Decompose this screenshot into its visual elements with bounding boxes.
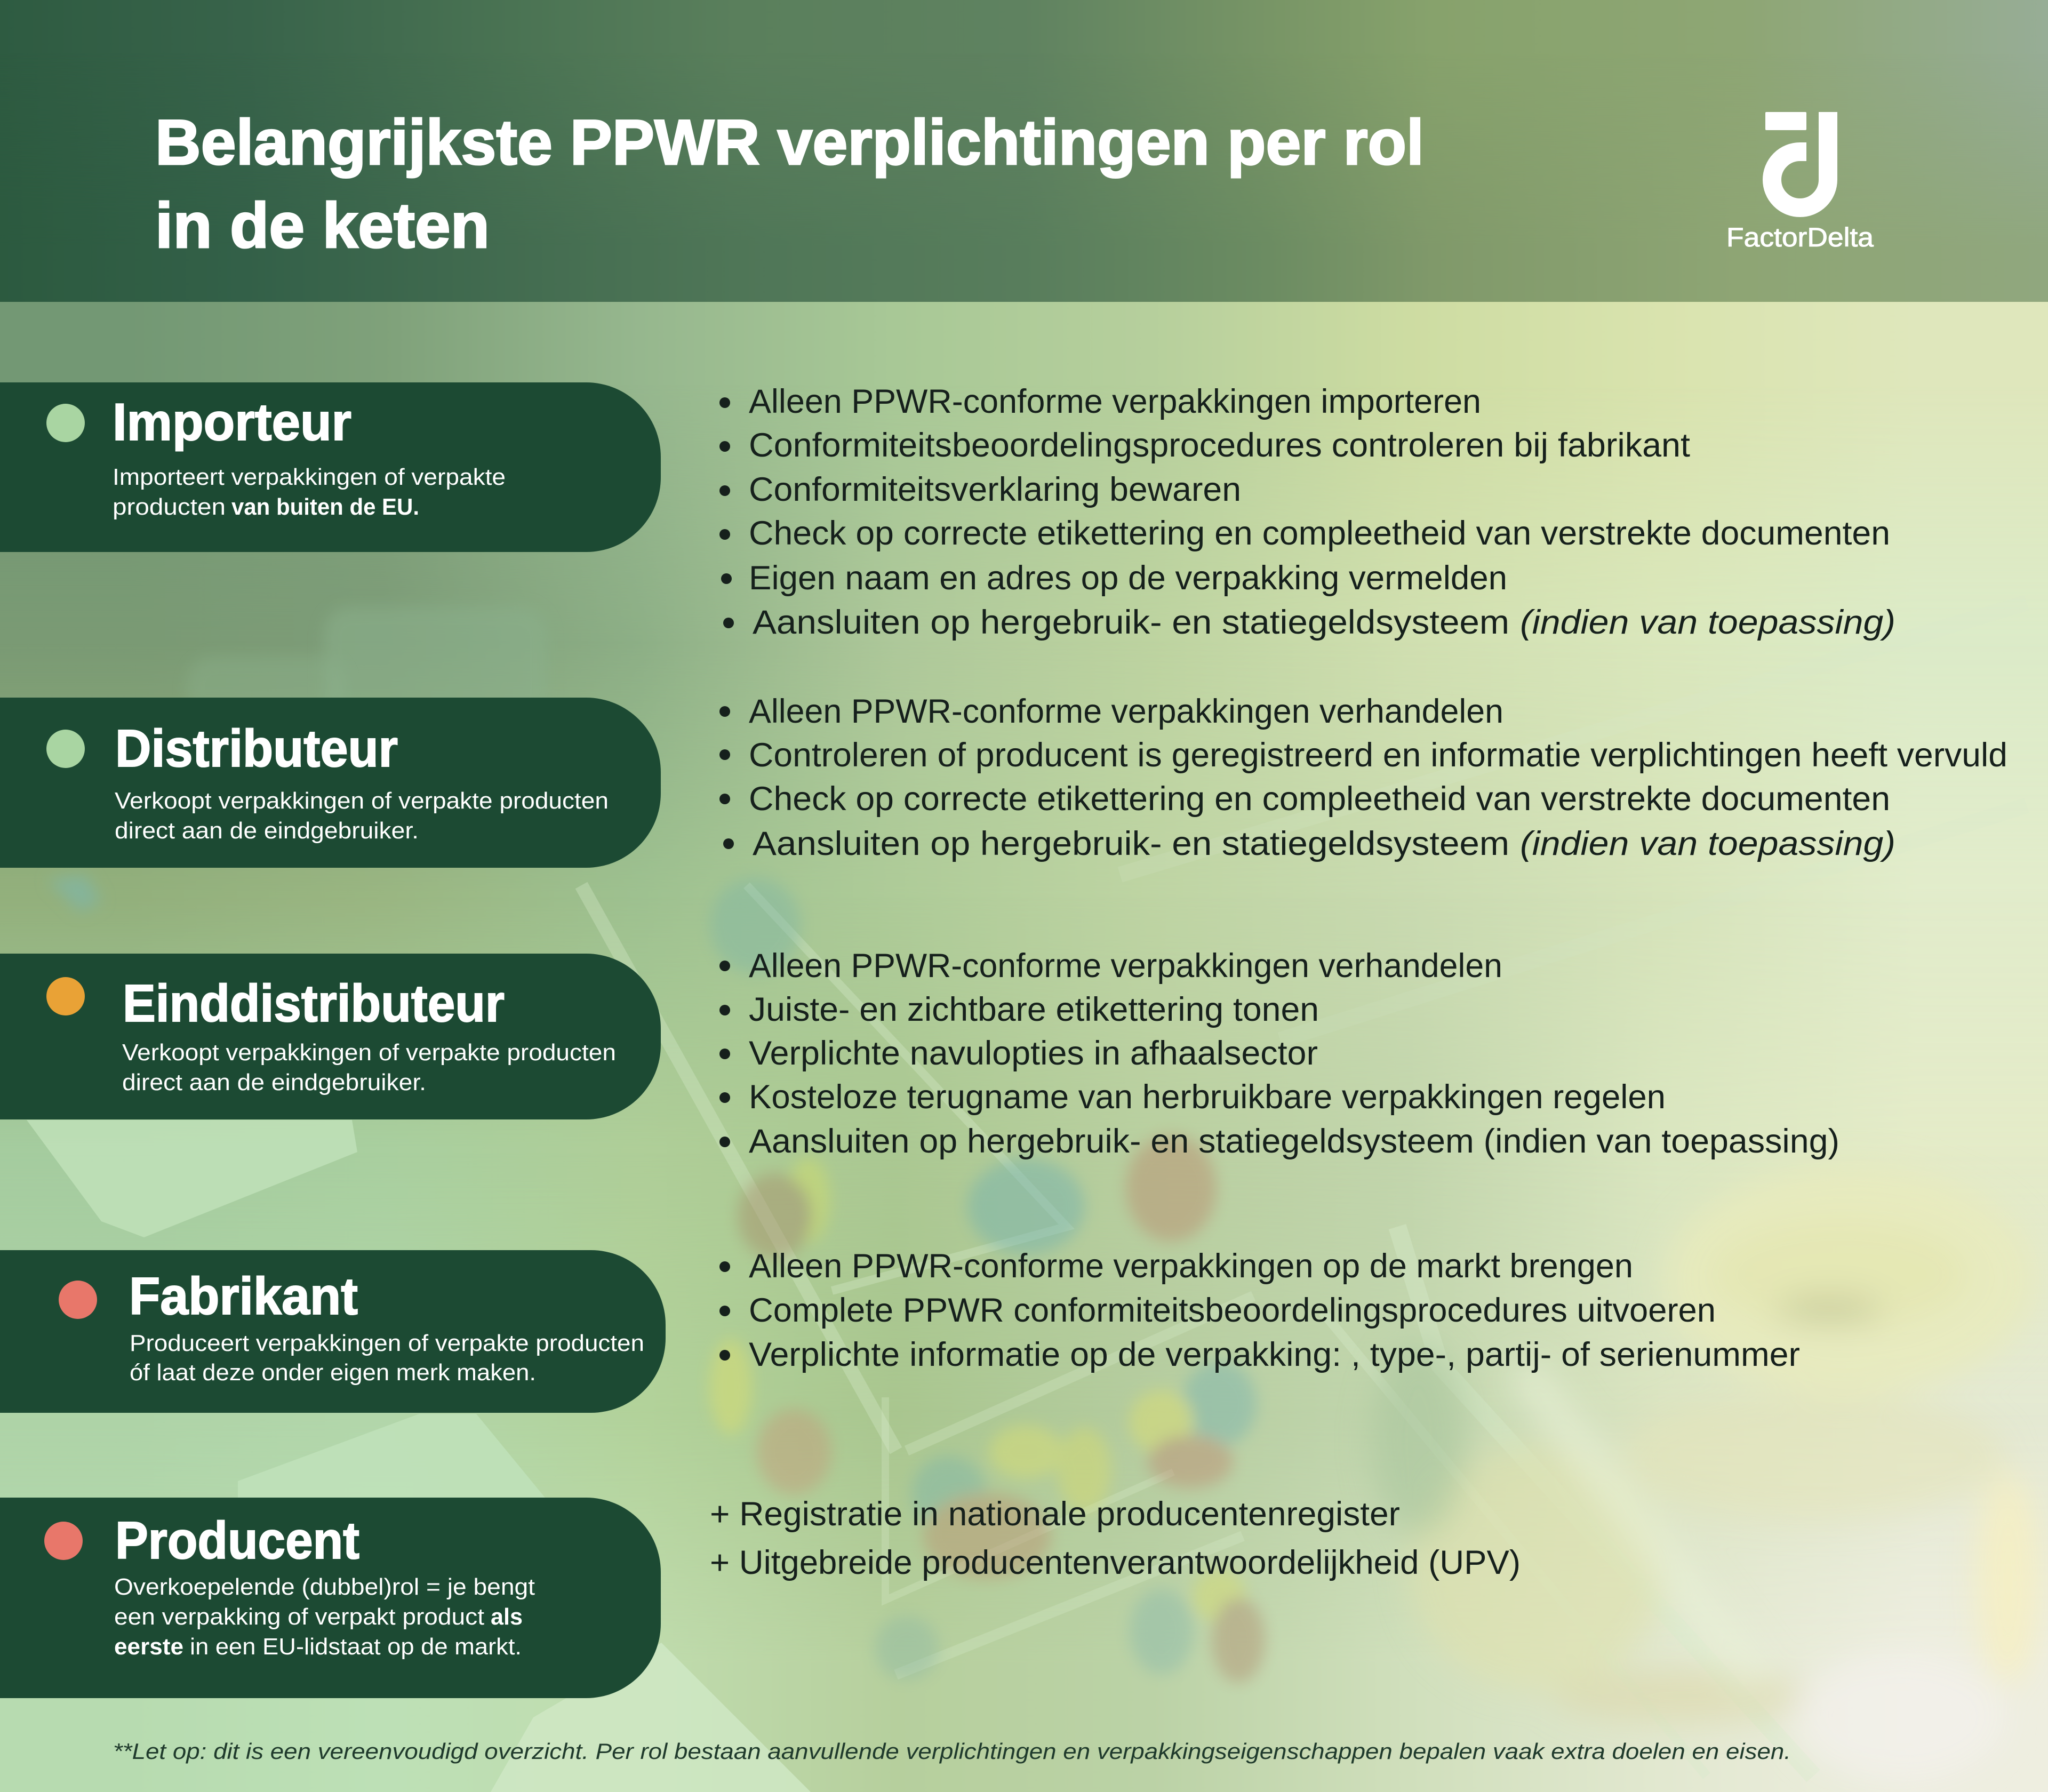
description: Verkoopt verpakkingen of verpakte producten bbox=[115, 788, 609, 814]
cookies bbox=[1371, 1165, 2040, 1781]
panel: Fabrikant bbox=[0, 1250, 666, 1413]
heading: Distributeur bbox=[115, 719, 398, 778]
logo: FactorDelta bbox=[1726, 112, 1874, 252]
description: van buiten de EU. bbox=[231, 494, 419, 520]
header band bbox=[0, 0, 2048, 302]
list: Importeur obligations bbox=[719, 383, 1895, 641]
panel: Einddistributeur bbox=[0, 954, 661, 1119]
status dot bbox=[46, 404, 85, 442]
heading: Einddistributeur bbox=[123, 974, 505, 1033]
description: eerste bbox=[114, 1634, 183, 1660]
logo: FactorDelta: FactorDelta bbox=[1726, 222, 1874, 252]
heading: Importeur bbox=[113, 393, 351, 451]
title: Belangrijkste PPWR verplichtingen per rol bbox=[155, 107, 1424, 178]
description: in een EU-lidstaat op de markt. bbox=[190, 1634, 522, 1660]
packaging cards bbox=[27, 607, 811, 1792]
description: Produceert verpakkingen of verpakte producten bbox=[130, 1330, 644, 1356]
status dot bbox=[46, 977, 85, 1015]
description bbox=[115, 788, 609, 844]
jar outlines bbox=[581, 603, 2027, 1776]
list: Producent obligations: + Uitgebreide producentenverantwoordelijkheid (UPV) bbox=[710, 1544, 1521, 1581]
list: Einddistributeur obligations bbox=[719, 947, 1839, 1160]
list: Fabrikant obligations: Alleen PPWR-conforme verpakkingen op de markt brengen bbox=[749, 1247, 1633, 1285]
heading: Fabrikant bbox=[129, 1267, 358, 1325]
list: Einddistributeur obligations: Kosteloze terugname van herbruikbare verpakkingen regelen bbox=[749, 1078, 1666, 1116]
list: Importeur obligations: Conformiteitsbeoordelingsprocedures controleren bij fabrikant bbox=[749, 427, 1690, 464]
description: als bbox=[491, 1604, 523, 1630]
list: Einddistributeur obligations: Juiste- en zichtbare etikettering tonen bbox=[749, 991, 1319, 1028]
list: Distributeur obligations: Controleren of producent is geregistreerd en informatie verplichtingen heeft vervuld bbox=[749, 737, 2007, 774]
panel: Importeur bbox=[0, 382, 661, 552]
description: direct aan de eindgebruiker. bbox=[115, 818, 419, 844]
list: Fabrikant obligations: Verplichte informatie op de verpakking: , type-, partij- of serienummer bbox=[749, 1336, 1800, 1373]
title: in de keten bbox=[155, 190, 490, 261]
list: Distributeur obligations: (indien van toepassing) bbox=[1520, 825, 1895, 862]
description: producten bbox=[113, 494, 226, 520]
heading: Producent bbox=[115, 1511, 359, 1570]
list: Importeur obligations: Conformiteitsverklaring bewaren bbox=[749, 471, 1241, 508]
list: Producent obligations: + Registratie in nationale producentenregister bbox=[710, 1495, 1400, 1533]
list: Fabrikant obligations: Complete PPWR conformiteitsbeoordelingsprocedures uitvoeren bbox=[749, 1292, 1716, 1329]
description: Verkoopt verpakkingen of verpakte producten bbox=[122, 1039, 616, 1066]
list: Importeur obligations: Aansluiten op hergebruik- en statiegeldsysteem bbox=[753, 604, 1509, 641]
description bbox=[113, 464, 506, 520]
description: Importeert verpakkingen of verpakte bbox=[113, 464, 506, 490]
status dot bbox=[59, 1281, 97, 1319]
list: Importeur obligations: Check op correcte etikettering en compleetheid van verstrekte documenten bbox=[749, 515, 1890, 552]
status dot bbox=[46, 730, 85, 768]
list: Distributeur obligations: Check op correcte etikettering en compleetheid van verstrekte documenten bbox=[749, 780, 1890, 818]
list: Importeur obligations: Eigen naam en adres op de verpakking vermelden bbox=[749, 559, 1507, 597]
description: Overkoepelende (dubbel)rol = je bengt bbox=[114, 1574, 535, 1600]
description: direct aan de eindgebruiker. bbox=[122, 1069, 426, 1095]
panel: Distributeur bbox=[0, 698, 661, 868]
list: Einddistributeur obligations: Aansluiten op hergebruik- en statiegeldsysteem (indien van toepassing) bbox=[749, 1123, 1839, 1160]
list: Einddistributeur obligations: Alleen PPWR-conforme verpakkingen verhandelen bbox=[749, 947, 1502, 985]
footnote: **Let op: dit is een vereenvoudigd overzicht. Per rol bestaan aanvullende verplichtingen en verpakkingseigenschappen bepalen vaak extra doelen en eisen. bbox=[113, 1739, 1791, 1764]
description bbox=[114, 1574, 535, 1660]
list: Einddistributeur obligations: Verplichte navulopties in afhaalsector bbox=[749, 1035, 1318, 1072]
description bbox=[122, 1039, 616, 1095]
list: Distributeur obligations: Aansluiten op hergebruik- en statiegeldsysteem bbox=[753, 825, 1509, 862]
list: Importeur obligations: Alleen PPWR-conforme verpakkingen importeren bbox=[749, 383, 1481, 420]
status dot bbox=[44, 1522, 83, 1560]
description bbox=[130, 1330, 644, 1386]
panel: Producent bbox=[0, 1498, 661, 1698]
description: óf laat deze onder eigen merk maken. bbox=[130, 1359, 536, 1386]
list: Distributeur obligations: Alleen PPWR-conforme verpakkingen verhandelen bbox=[749, 693, 1503, 730]
title bbox=[155, 107, 1424, 261]
list: Fabrikant obligations bbox=[719, 1247, 1800, 1373]
list: Importeur obligations: (indien van toepassing) bbox=[1520, 604, 1895, 641]
list: Distributeur obligations bbox=[719, 693, 2007, 862]
list: Producent obligations bbox=[710, 1495, 1521, 1581]
confetti inside jar bbox=[709, 877, 1265, 1683]
description: een verpakking of verpakt product bbox=[114, 1604, 484, 1630]
